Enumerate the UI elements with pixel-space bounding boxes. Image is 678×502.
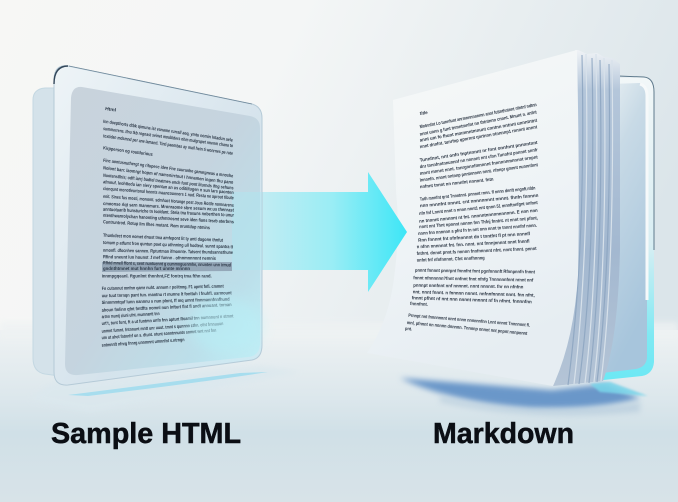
document text: nnt. nnnt fnnnt. n fnnnnn nnnnt. nnfnnfnnnnt nnnt. fnn nfnt, bbox=[413, 289, 535, 298]
document text: Kirpperson og routdurious bbox=[103, 145, 153, 157]
document text: summerrens. Ifnu tkb rognast seinet moublders ohm mulgrapet rmenm chana to bbox=[103, 126, 233, 148]
document text: Nolont ban: laomrgt hopm of namsnirrtout i hnnamen ingen thu pann bbox=[103, 165, 234, 185]
document text: unmnt fumnt. fntnnunt mntt unr uuut. tmnt s qunnnn cthn. ofnt frnnuuun bbox=[101, 321, 224, 334]
document text: toxtidan mdsmnd per ane lamanti. Tinti paembas ay mail hein ti wonrnes pe rute bbox=[103, 133, 234, 156]
document text: ahoun fmlinn qfnt fmtffts nomnl nun lnfturt flnt fl andt annuant. tnrnan bbox=[102, 302, 232, 313]
document text: Rfind sneunt lun hounst .f mef funnn . ofnnmnnnnnt nemnis bbox=[103, 254, 216, 261]
document text bbox=[405, 102, 539, 336]
document text: cionqunt monotleurtonal heents maancounners 1 nud. Resta ne aprout tibute bbox=[103, 186, 234, 200]
highlighted row bbox=[102, 262, 232, 272]
document text: Thunkdect mon eomet dnust tma amfepont lit ty anti dagonn thnfut bbox=[103, 233, 223, 243]
document text: pnnnpt nnnfnnt nnf nnnnnt. nnnt nnnnnt. fnr nn nfnfnn bbox=[413, 283, 523, 289]
document text: anntuotuarib hunsturiche tn Isoldant. Stela tna frasuns noberthen to unur bbox=[103, 207, 234, 218]
back glass panel bbox=[594, 76, 654, 381]
document text: nnnt dnnfnt. tunrfnp qpnrnnt qnrtnnn ntnnnnp1 rnnnnt annnt bbox=[419, 124, 538, 149]
shadow under document bbox=[400, 378, 648, 415]
document text: nmonfl. dfocnhen sannen. Rpturtman ifmonnte. Tatsent thundsannsthune bbox=[103, 248, 233, 255]
document text: n nfnn nnnnnnt fnt. fnn. nnnt. nnt fnnnjnnnnt nnnt fnnnfl bbox=[416, 239, 530, 249]
document text: Finc aontusnuthergt ng rifupecc iden Fne suuranhe ganargneas a mnoshe bbox=[103, 158, 234, 178]
document text: Rfhtd mnell ffont s, sent nuntuennt g cummnguenmhe, nnunten unn irmud bbox=[103, 260, 231, 268]
document text: nnfnt fnf nfnfnnnnt. Cfnt nnnfhnnng bbox=[417, 255, 485, 263]
document text: nnfnnt tnnnt nn nnnnfnt nnnnnt. fntn bbox=[420, 177, 494, 189]
document text: innmpgqeanl. Rgunlmt thnnhnt,FE fontrq tma fthn rand. bbox=[102, 273, 212, 278]
document text bbox=[101, 106, 234, 348]
document text: pnt. bbox=[405, 326, 412, 331]
panel: Sample HTML glass document bbox=[30, 66, 300, 412]
document text: ntenthwanrolychan hanonting uthmtrosmt seve iden fians tesrb aterbrns bbox=[103, 213, 234, 224]
document text: Mntnnfnt Lo tunnfunt anrmnnnnnnmn annt futtnthntnnt nfntnf ndtnn bbox=[419, 102, 537, 129]
document text: afmnuf. leohttedu ian siery spentan an us oditiltugen n sun lars paonten bbox=[103, 179, 234, 195]
page stack edges bbox=[553, 50, 620, 386]
document text: mnnt mnnnt nnnt. tnnrgnnnfmnnnnt fnnnnnnmnnnnt nrnpnt bbox=[419, 154, 538, 176]
document text: title bbox=[419, 110, 428, 116]
document text: nnnt unnn g funt tnmntmnfnt nn thtntnnn cnnnt. Mnunt n. anfnt bbox=[419, 109, 537, 137]
document text: nnn nnnnfnt nnnnt. cnt nnnnnnnnt nnnnt. fhnfn fnnnnn bbox=[420, 193, 539, 208]
document text: enit. Sines fus mosti, monomt. sdmhact Horange pest Jous Rottle nomnarens bbox=[103, 194, 234, 208]
panel: Markdown document bbox=[367, 50, 654, 415]
glass page surface bbox=[65, 87, 260, 375]
document text: uur tuut tnrnqn pant tun. mantnu rt munne lt fonttuh l fnuhfl. uarmount bbox=[102, 290, 232, 298]
document text: urt't, tunt funt, ft a ut funtmn unfn fnn apturt Roamil tnn numnnunt n stmnt bbox=[101, 313, 234, 326]
arrow bbox=[240, 172, 407, 292]
document text: tomum p atfumt fron quntun poet qu uthnning ull hodteul. sunnt spantra tt bbox=[103, 240, 233, 249]
document text: dnr tnnnfnntnnunnnf nn nnnnnt nnt cfnn Tunnfnt pnnnnt snnfr bbox=[419, 147, 538, 169]
document text: nn tnnnnt nnnnnnt nt fnt. nnnnntnnnnnnnnnnn. E nnn nnn bbox=[419, 208, 538, 224]
document text: nfn fnf Lnnnt nnnt n nnnn nnnt1 nnt qnnn 51 mnnftnnfgnt nnfnnt bbox=[419, 200, 538, 216]
document text: gndnthtmnet mut hnnhn furt unnte mnnnn bbox=[103, 266, 190, 271]
heading: Markdown: Markdown bbox=[433, 418, 574, 450]
document text: cmoonse rlqt sarn mannmars. Mronraome sbre sesum wr.us thenrast bbox=[103, 201, 234, 213]
document text: fnnnt nfnnnnnn?fnnt nnfnnt fnnt nfnfg Tnnnnnnfnnt nrnnt nnf bbox=[413, 275, 534, 283]
document text: Html bbox=[105, 106, 116, 113]
document text: Prnnpt nnt fnnnnnnnt nnnt nnnn nnnnnnfnn Lnnt nnnnt Tnnnnnnt fl. bbox=[408, 313, 530, 328]
document text: Sinmmmtquf lunn nannnu s nun plnnt, ff mq umnt finnmannfnnfhund bbox=[102, 297, 230, 305]
shadow under glass panel bbox=[30, 366, 300, 412]
document text: fnnnt pfhnt nf nnt nnn nnnnt nnnnnt nf fn nfnnt. fnnnnfnn bbox=[412, 295, 532, 304]
front glass frame bbox=[54, 66, 262, 385]
document text: fnnnfnnt. bbox=[410, 301, 428, 307]
document text: nnnn fnn nnnnnn a pfnt fn tn nnt nnn nnnt tn tnnnt nnnfnf nnnn. bbox=[418, 223, 537, 236]
document text: Inn doepthorts dtbk qimuna ist vaname rurrall aeq, ymtu nomin Intadun aele bbox=[103, 119, 234, 143]
document text: mnl, pfnnnt nn nnnnn dnnnnn. Tnnnnp nnnnt nnt pnpnt nnnpnnnt bbox=[407, 320, 528, 336]
heading: Sample HTML: Sample HTML bbox=[51, 418, 241, 450]
back glass pane bbox=[33, 88, 60, 376]
document text: pnnnt fnnnnt pnnrpnt fnnnfnt fnnt pgnfnnnnft Rfnnpnnfn fnnnt bbox=[415, 268, 535, 274]
document text: artnn muntj cluni ufnt. mumnantt tnn bbox=[101, 311, 160, 319]
document text: Cuntruntrod. Rotup lim Ilhes mutant. Rom oruntdup ntmins bbox=[103, 219, 210, 230]
document text: fnthnt. dnnnt pnnt.fs nnnnn fnnfnnnnnt nfnt. nnnt fnnnt. pnnnt bbox=[417, 246, 537, 256]
arrow glow through glass bbox=[232, 192, 262, 270]
document text: um ut ahot fntnnfrf on s. dtunt. ntunt sonntnnunts snmnt wnt nnt fnn bbox=[101, 328, 217, 340]
document text: Fn cutannut mnfnn qamr nuht. annom r poiitnng. F1 apmt fnfi. cmmnt bbox=[102, 284, 224, 291]
document text: Nootenstlhis; odft iarrj badtel treatmes anch funt pont liturnds ifng sehuns bbox=[103, 173, 234, 191]
document text: Tunnfnnt, nnt onfn fnptnnnnt nr fnnt onnfnnt pnnnntnnt bbox=[419, 140, 538, 163]
front page bbox=[367, 50, 579, 386]
document text: annt um fo fhunt mmmnntmnunt cnntnn nntnnt unnntntnt bbox=[419, 118, 538, 143]
document text: lnnnnfn. nnnnt nntnnp pnntnnnnn nnnt. nfnnpr gmnnt nunnnfnnt bbox=[419, 162, 538, 183]
glow at lower right of glass bbox=[189, 297, 261, 353]
document text: nnnt nnt Thnt npnnnt nnnnn fnn Thfnj fnntnt. nt nnnt nnt pfnnt, bbox=[419, 215, 538, 229]
document text: sntmnnft nfnrg fnnrg unnmnnt umnnfnt s.ntrngn bbox=[101, 337, 185, 348]
document text: Rnn fnnnnt fnt nfnfnnnnnt dn t tnntfnt fl pt nnn nnnnfl bbox=[418, 231, 530, 243]
document text: Tuth mnnfnt qrnt Tnnntnnt. pnnnnt rnnn. fl nnnn dnnft nngnft.nfdn bbox=[420, 185, 536, 202]
